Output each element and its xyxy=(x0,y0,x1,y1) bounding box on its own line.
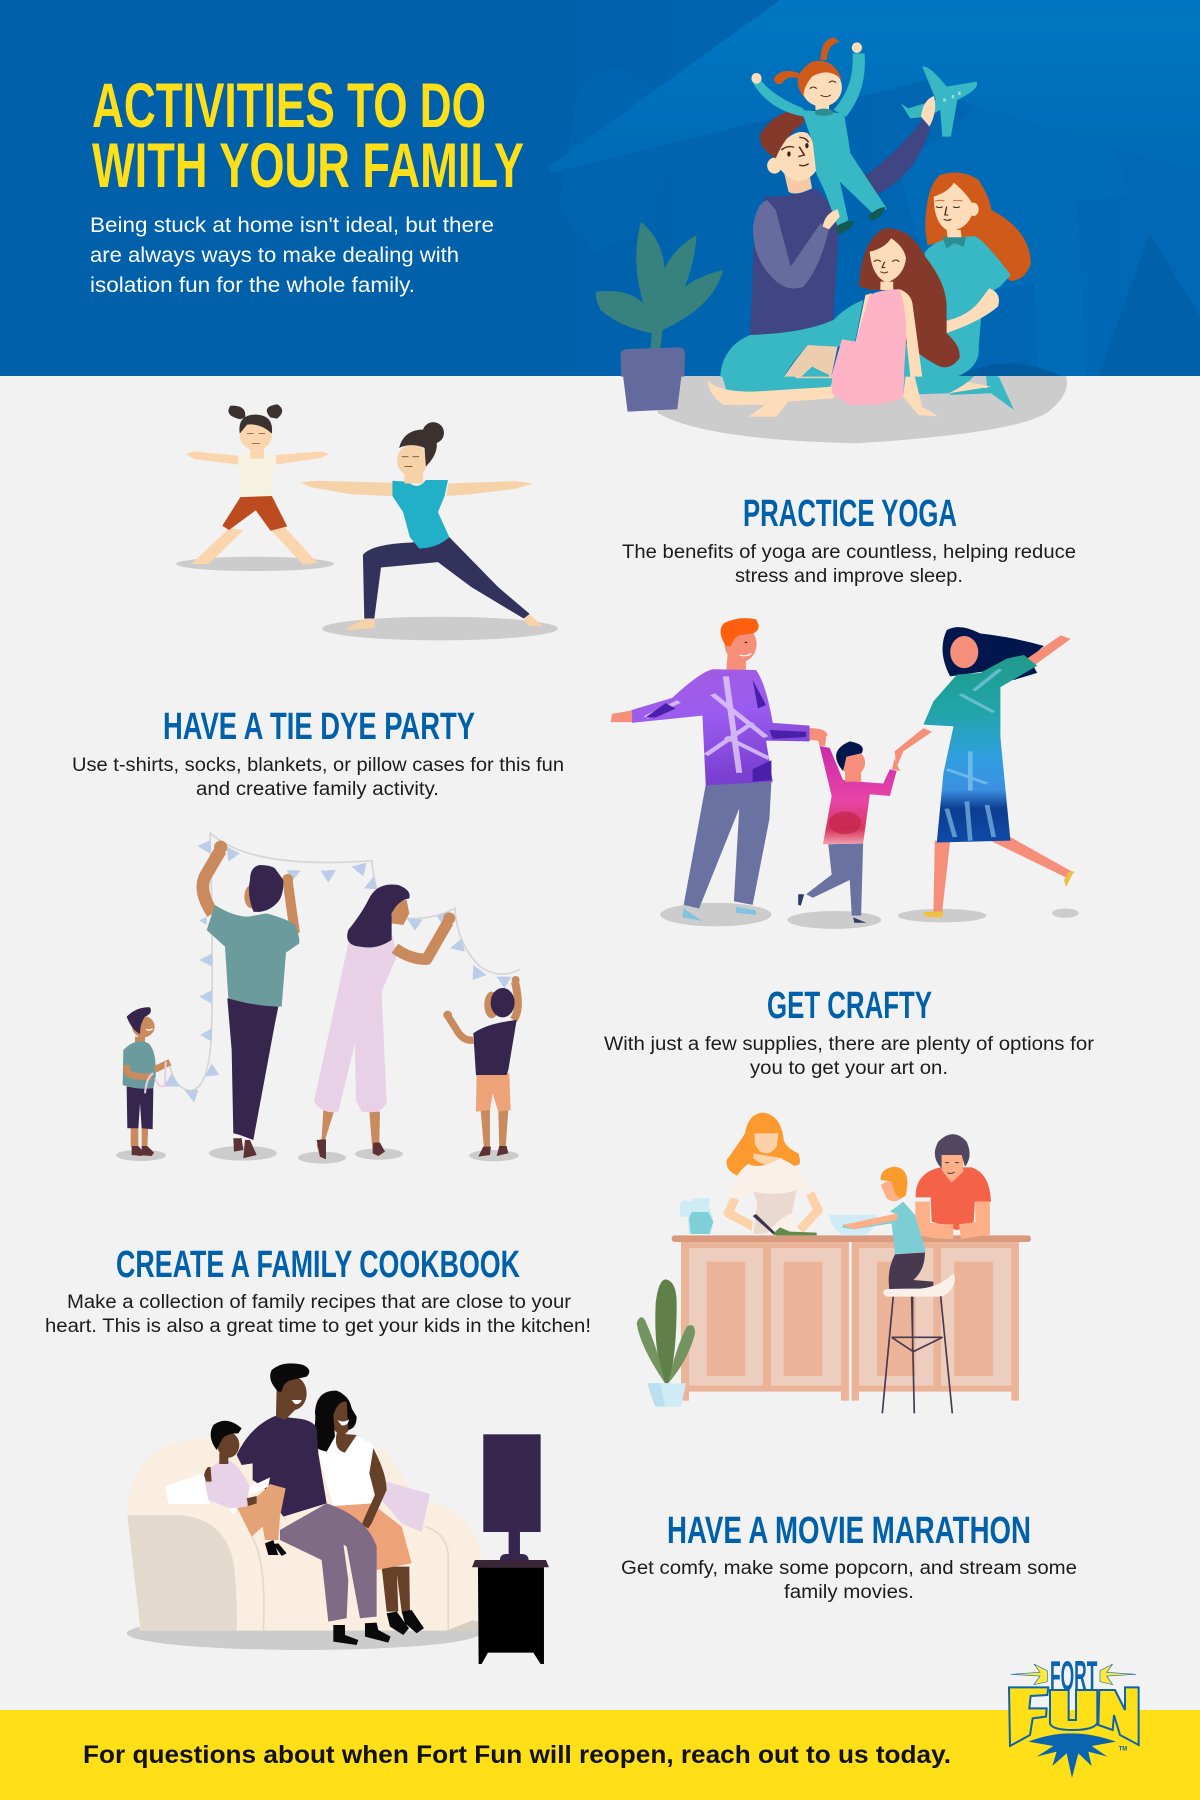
text: movie marathon xyxy=(621,1558,1077,1603)
television on stand xyxy=(472,1434,549,1664)
footer text: For questions about when Fort Fun will reopen, reach out to us today. xyxy=(83,1741,951,1769)
mother xyxy=(902,173,1031,377)
child doing yoga xyxy=(176,404,334,571)
daughter xyxy=(831,228,960,377)
header banner xyxy=(0,0,1200,376)
boy on right xyxy=(443,976,520,1157)
text: get crafty xyxy=(604,1034,1095,1079)
icon: water pitcher xyxy=(680,1198,713,1234)
intro text: are always ways to make dealing with xyxy=(90,244,459,267)
illustration: tie dye family xyxy=(611,618,1079,929)
woman in tie dye xyxy=(895,627,1079,922)
woman xyxy=(311,1391,424,1635)
illustration: family cooking in kitchen xyxy=(637,1113,1031,1413)
logo star xyxy=(1028,1733,1116,1778)
floor shadow xyxy=(127,1617,480,1650)
title xyxy=(92,71,524,201)
woman xyxy=(314,884,455,1159)
title: ACTIVITIES TO DO xyxy=(92,71,486,141)
text: get crafty: With just a few supplies, there are plenty of options for xyxy=(604,1034,1095,1055)
title: WITH YOUR FAMILY xyxy=(92,131,524,201)
heading: tie dye party: HAVE A TIE DYE PARTY xyxy=(163,706,475,748)
text: practice yoga: The benefits of yoga are countless, helping reduce xyxy=(622,542,1076,563)
heading: practice yoga: PRACTICE YOGA xyxy=(743,493,957,535)
text: family cookbook: Make a collection of family recipes that are close to your xyxy=(67,1292,572,1313)
woman xyxy=(726,1113,818,1235)
toy airplane xyxy=(901,67,977,137)
heading: movie marathon: HAVE A MOVIE MARATHON xyxy=(667,1510,1031,1552)
text: get crafty: you to get your art on. xyxy=(750,1058,948,1079)
sofa xyxy=(127,1439,482,1631)
illustration: crafty family hanging bunting xyxy=(116,833,520,1164)
text: movie marathon: family movies. xyxy=(784,1582,914,1603)
illustration: family playing with airplane xyxy=(596,37,1067,443)
illustration: family on sofa watching tv xyxy=(127,1363,549,1664)
child in tie dye xyxy=(787,734,900,929)
intro text xyxy=(90,214,494,297)
heading: family cookbook: CREATE A FAMILY COOKBOOK xyxy=(116,1244,520,1286)
intro text: isolation fun for the whole family. xyxy=(90,274,415,297)
family floor section xyxy=(623,376,1067,444)
small boy xyxy=(123,1007,170,1156)
shadows xyxy=(116,1146,519,1164)
child xyxy=(204,1421,287,1556)
illustration: yoga xyxy=(176,404,558,640)
text: family cookbook xyxy=(45,1292,591,1337)
father xyxy=(720,110,930,377)
logo trademark: TM xyxy=(1119,1747,1127,1753)
footer band xyxy=(0,1710,1200,1800)
bunting xyxy=(164,833,520,1103)
text: tie dye party: Use t-shirts, socks, blankets, or pillow cases for this fun xyxy=(72,755,564,776)
toddler xyxy=(751,37,887,234)
intro text: Being stuck at home isn't ideal, but there xyxy=(90,214,494,237)
icon: potted plant xyxy=(637,1279,695,1407)
man xyxy=(237,1363,391,1645)
man xyxy=(203,841,299,1158)
bar stool xyxy=(882,1273,955,1413)
text: practice yoga: stress and improve sleep. xyxy=(735,566,963,587)
man in tie dye xyxy=(611,618,828,926)
text: family cookbook: heart. This is also a great time to get your kids in the kitchen! xyxy=(45,1316,591,1337)
logo spark rays xyxy=(1011,1664,1136,1685)
man xyxy=(916,1134,991,1232)
kitchen island xyxy=(672,1235,1031,1401)
text: tie dye party xyxy=(72,755,564,800)
icon: potted plant xyxy=(596,222,723,377)
text: movie marathon: Get comfy, make some popcorn, and stream some xyxy=(621,1558,1077,1579)
text: tie dye party: and creative family activity. xyxy=(196,779,439,800)
text: practice yoga xyxy=(622,542,1076,587)
heading: get crafty: GET CRAFTY xyxy=(767,985,932,1027)
logo: fort fun: FORT xyxy=(1050,1652,1097,1699)
woman doing yoga xyxy=(301,422,558,640)
logo word fun xyxy=(1009,1687,1139,1746)
logo: fort fun xyxy=(1009,1652,1139,1778)
icon: mixing bowl xyxy=(829,1215,877,1235)
boy on stool xyxy=(842,1167,933,1289)
father's hand xyxy=(823,209,840,229)
